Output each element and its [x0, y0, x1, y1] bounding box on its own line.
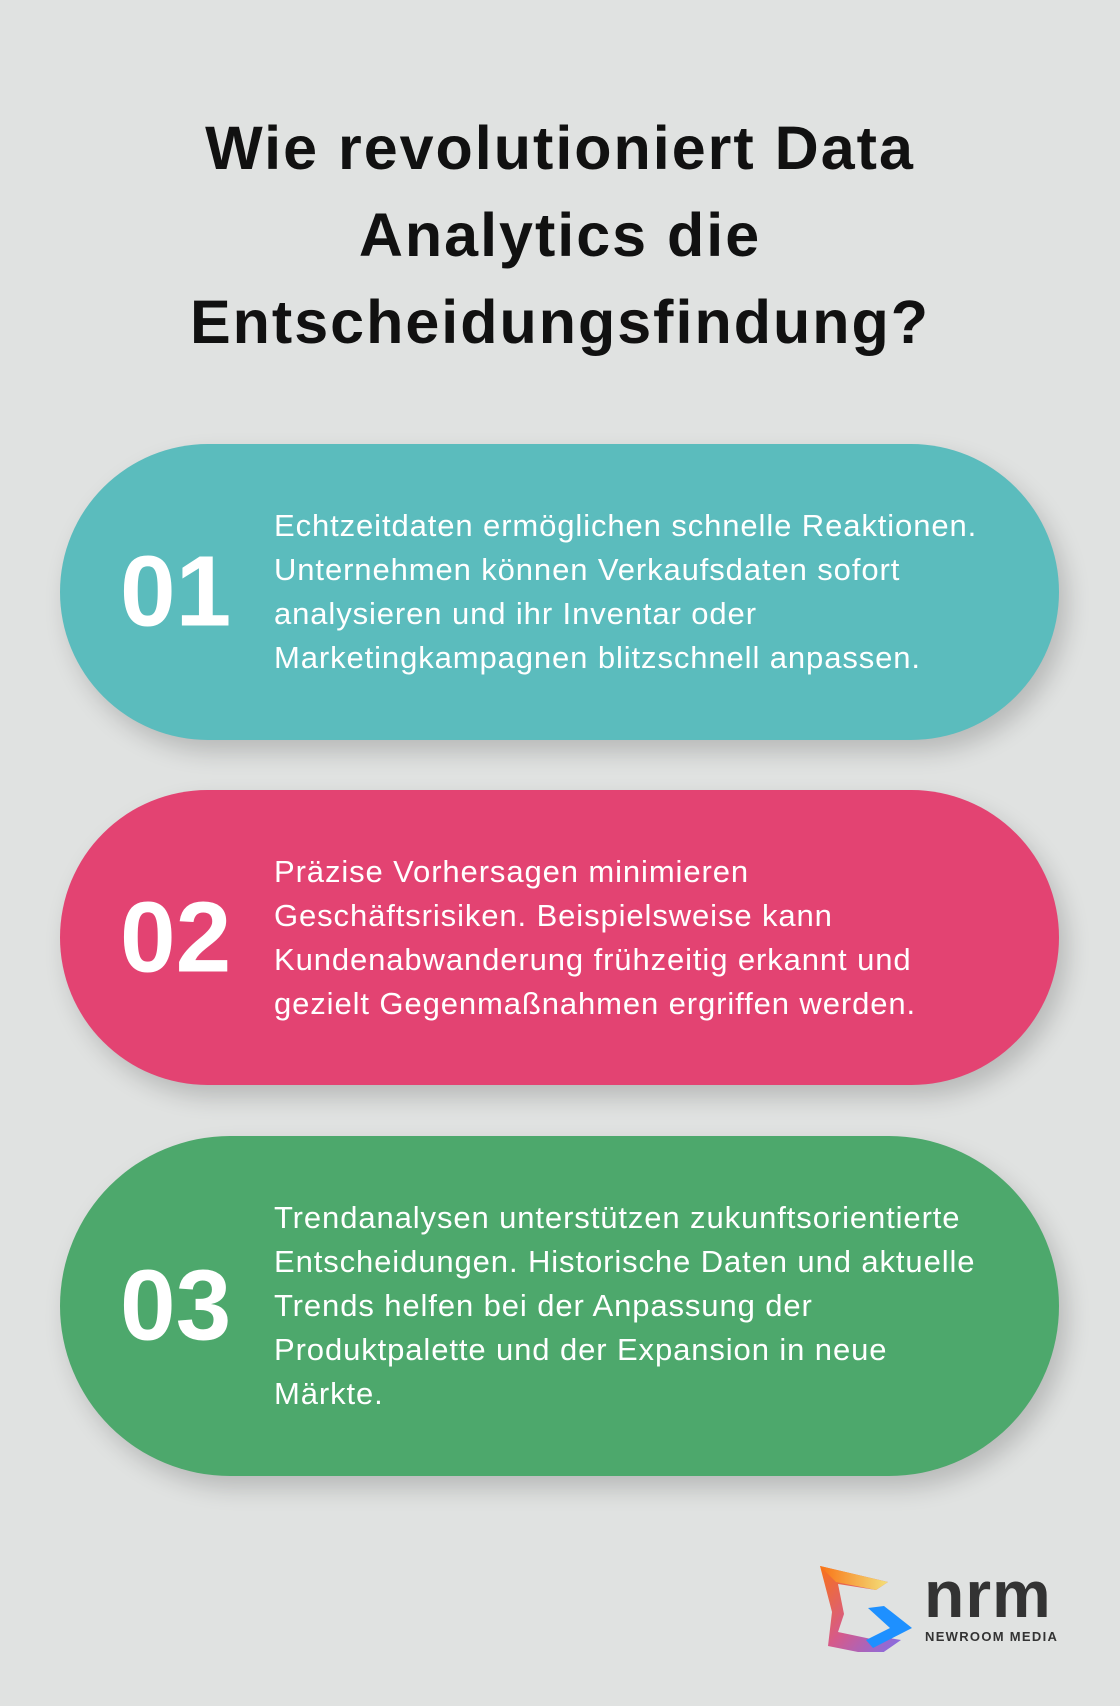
- title: Analytics die: [359, 201, 761, 269]
- number 02: 02: [120, 881, 231, 993]
- text 02: [274, 854, 916, 1020]
- brand subtitle: NEWROOM MEDIA: [925, 1629, 1058, 1644]
- text 01: Marketingkampagnen blitzschnell anpassen.: [274, 640, 921, 675]
- panel: 01: [60, 444, 1059, 740]
- number 01: 01: [120, 536, 231, 648]
- text 03: Trends helfen bei der Anpassung der: [274, 1288, 813, 1323]
- text 02: gezielt Gegenmaßnahmen ergriffen werden.: [274, 986, 916, 1020]
- icon: logo mark: [820, 1566, 912, 1652]
- text 02: Präzise Vorhersagen minimieren: [274, 854, 749, 888]
- logo: [820, 1557, 1058, 1652]
- text 03: [274, 1200, 975, 1411]
- title: Entscheidungsfindung?: [190, 288, 930, 356]
- text 03: Märkte.: [274, 1376, 384, 1411]
- title: [190, 114, 930, 356]
- brand name: nrm: [924, 1557, 1052, 1631]
- title: Wie revolutioniert Data: [205, 114, 915, 182]
- text 01: Echtzeitdaten ermöglichen schnelle Reaktionen.: [274, 508, 977, 543]
- text 01: analysieren und ihr Inventar oder: [274, 596, 757, 631]
- text 03: Entscheidungen. Historische Daten und aktuelle: [274, 1244, 975, 1279]
- text 02: Kundenabwanderung frühzeitig erkannt und: [274, 942, 912, 976]
- number 03: 03: [120, 1250, 231, 1362]
- panel: 02: [60, 790, 1059, 1085]
- text 03: Produktpalette und der Expansion in neue: [274, 1332, 887, 1367]
- text 01: [274, 508, 977, 675]
- text 01: Unternehmen können Verkaufsdaten sofort: [274, 552, 900, 587]
- text 03: Trendanalysen unterstützen zukunftsorientierte: [274, 1200, 960, 1235]
- text 02: Geschäftsrisiken. Beispielsweise kann: [274, 898, 833, 932]
- panel: 03: [60, 1136, 1059, 1476]
